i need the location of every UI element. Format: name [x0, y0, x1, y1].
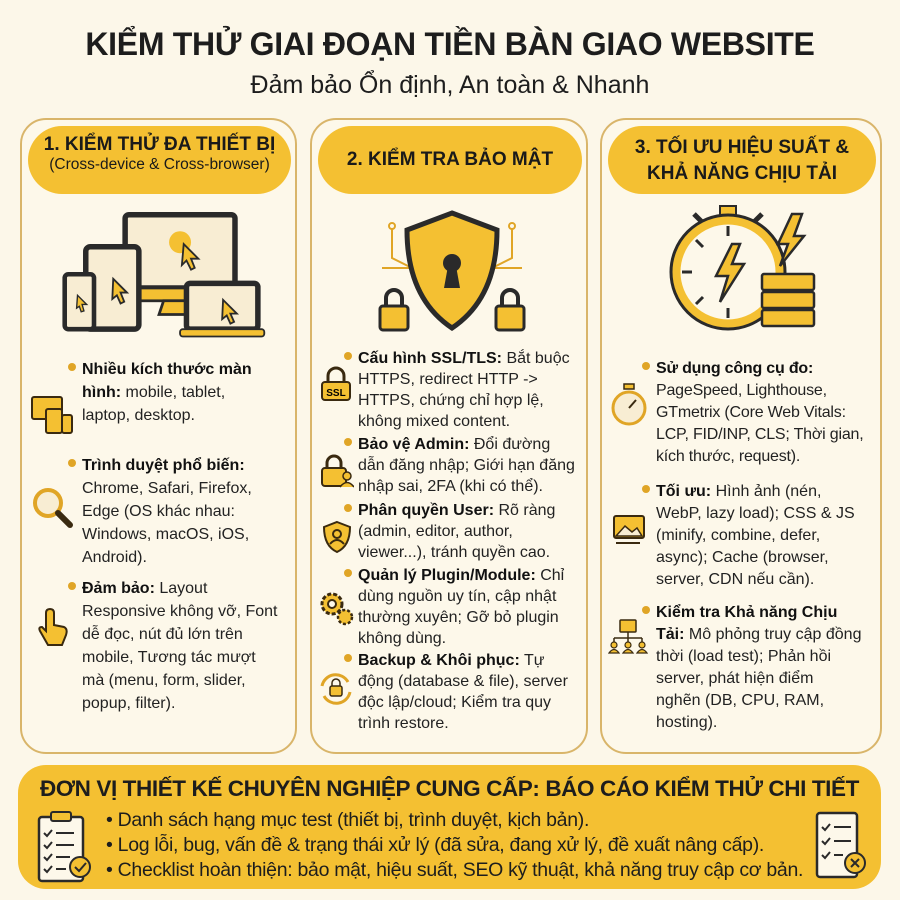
bullet: user roles: viewer...), tránh quyền cao. — [358, 544, 550, 561]
icon: image — [613, 515, 645, 544]
bullet: plugins: Quản lý Plugin/Module: Chỉ — [358, 567, 564, 584]
icon: screens — [31, 396, 73, 434]
bullet: plugins — [344, 567, 564, 647]
icon: SSL lock — [321, 366, 351, 401]
bullet: optimization: (minify, combine, defer, — [656, 527, 820, 544]
bullet: ensure: mobile, Tương tác mượt — [82, 649, 256, 666]
bullet: browsers: Windows, macOS, iOS, — [82, 526, 249, 543]
bullet: browsers: Chrome, Safari, Firefox, — [82, 480, 252, 497]
bullet: screen sizes: hình: mobile, tablet, — [82, 384, 225, 401]
banner: detailed testing report — [18, 765, 881, 889]
bullet: ensure: dễ đọc, nút đủ lớn trên — [82, 626, 243, 643]
bullet: browsers: Android). — [82, 549, 147, 566]
banner list: • Log lỗi, bug, vấn đề & trạng thái xử lý (đã sửa, đang xử lý, đề xuất nâng cấp). — [106, 834, 764, 856]
heading: panel 1: (Cross-device & Cross-browser) — [49, 156, 270, 173]
bullet: backup — [344, 652, 568, 732]
bullet: load testing: Kiểm tra Khả năng Chịu — [656, 604, 837, 621]
bullet: ensure: popup, filter). — [82, 695, 175, 712]
bullet: user roles: (admin, editor, author, — [358, 523, 513, 540]
heading: panel 3: 3. TỐI ƯU HIỆU SUẤT & — [635, 137, 849, 158]
bullet: load testing: Tải: Mô phỏng truy cập đồng — [656, 626, 861, 643]
bullet: admin — [344, 436, 575, 495]
bullet: browsers: Trình duyệt phổ biến: — [82, 457, 245, 474]
icon: checklist — [816, 812, 866, 878]
bullet: admin: dẫn đăng nhập; Giới hạn đăng — [358, 457, 575, 474]
bullet: screen sizes: Nhiều kích thước màn — [82, 361, 252, 378]
bullet: load testing — [642, 604, 861, 731]
icon: clipboard check — [38, 811, 91, 882]
bullet: backup: Backup & Khôi phục: Tự — [358, 652, 544, 669]
icon: shield with locks — [378, 210, 526, 332]
title: KIỂM THỬ GIAI ĐOẠN TIỀN BÀN GIAO WEBSITE — [85, 26, 815, 62]
bullet: admin: Bảo vệ Admin: Đổi đường — [358, 436, 550, 453]
bullet: SSL — [344, 349, 570, 430]
bullet: SSL: HTTPS, chứng chỉ hợp lệ, — [358, 392, 544, 409]
icon: SSL lock: SSL — [326, 388, 346, 399]
panel: security — [310, 118, 588, 754]
bullet: SSL: Cấu hình SSL/TLS: Bắt buộc — [358, 350, 570, 367]
icon: shield user — [323, 520, 351, 554]
heading: panel 3 — [608, 126, 876, 194]
bullet: backup: trình restore. — [358, 715, 449, 732]
bullet: screen sizes: laptop, desktop. — [82, 407, 195, 424]
bullet: optimization: async); Cache (browser, — [656, 549, 829, 566]
bullet: load testing: thời (load test); Phản hồi — [656, 648, 831, 665]
panel: performance — [600, 118, 882, 754]
icon: lock user — [321, 454, 354, 488]
bullet: tools: GTmetrix (Core Web Vitals: — [656, 404, 846, 421]
bullet: user roles — [344, 502, 555, 561]
heading: panel 3: KHẢ NĂNG CHỊU TẢI — [647, 163, 837, 184]
bullet: optimization: server, CDN nếu cần). — [656, 571, 814, 588]
bullet: tools: LCP, FID/INP, CLS; Thời gian, — [656, 426, 863, 443]
bullet: browsers — [68, 457, 252, 566]
bullet: SSL: HTTPS, redirect HTTP -> — [358, 371, 538, 388]
icon: network users — [608, 619, 648, 654]
subtitle: Đảm bảo Ổn định, An toàn & Nhanh — [251, 71, 649, 99]
icon: magnifier — [33, 488, 73, 528]
bullet: SSL: không mixed content. — [358, 413, 510, 430]
bullet: backup: động (database & file), server — [358, 673, 568, 690]
icon: stopwatch small — [612, 383, 646, 426]
bullet: plugins: dùng nguồn uy tín, cập nhật — [358, 588, 556, 605]
bullet: admin: nhập sai, 2FA (khi có thể). — [358, 478, 543, 495]
bullet: tools: Sử dụng công cụ đo: — [656, 360, 813, 377]
banner list: • Danh sách hạng mục test (thiết bị, trình duyệt, kịch bản). — [106, 809, 589, 831]
bullet: plugins: thường xuyên; Gỡ bỏ plugin — [358, 609, 559, 626]
bullet: tools — [642, 360, 863, 465]
heading: panel 1 — [28, 126, 291, 194]
bullet: browsers: Edge (OS khác nhau: — [82, 503, 235, 520]
bullet: load testing: server, phát hiện điểm — [656, 670, 813, 687]
bullet: optimization — [642, 483, 855, 588]
bullet: optimization: WebP, lazy load); CSS & JS — [656, 505, 855, 522]
banner list: • Checklist hoàn thiện: bảo mật, hiệu suất, SEO kỹ thuật, khả năng truy cập cơ bản. — [106, 859, 803, 881]
bullet: user roles: Phân quyền User: Rõ ràng — [358, 502, 555, 519]
heading: panel 2 — [318, 126, 582, 194]
bullet: screen sizes — [68, 361, 252, 424]
bullet: ensure — [68, 580, 278, 712]
icon: backup lock — [320, 673, 352, 705]
bullet: optimization: Tối ưu: Hình ảnh (nén, — [656, 483, 821, 500]
panel: cross-device — [20, 118, 297, 754]
bullet: backup: độc lập/cloud; Kiểm tra quy — [358, 694, 551, 711]
heading: panel 1: 1. KIỂM THỬ ĐA THIẾT BỊ — [44, 134, 275, 155]
icon: devices — [62, 212, 266, 338]
bullet: load testing: hosting). — [656, 714, 717, 731]
banner list — [106, 809, 803, 881]
bullet: tools: PageSpeed, Lighthouse, — [656, 382, 827, 399]
bullet: ensure: mà (menu, form, slider, — [82, 672, 246, 689]
bullet: tools: kích thước, request). — [656, 448, 800, 465]
icon: gears — [320, 592, 354, 626]
bullet: ensure: Đảm bảo: Layout — [82, 580, 207, 597]
bullet: load testing: nghẽn (DB, CPU, RAM, — [656, 692, 824, 709]
icon: stopwatch server — [670, 205, 816, 330]
heading: panel 2: 2. KIỂM TRA BẢO MẬT — [347, 149, 553, 170]
icon: touch hand — [38, 608, 68, 646]
banner heading: ĐƠN VỊ THIẾT KẾ CHUYÊN NGHIỆP CUNG CẤP: BÁO CÁO KIỂM THỬ CHI TIẾT — [40, 776, 859, 801]
bullet: ensure: Responsive không vỡ, Font — [82, 603, 277, 620]
bullet: plugins: không dùng. — [358, 630, 446, 647]
